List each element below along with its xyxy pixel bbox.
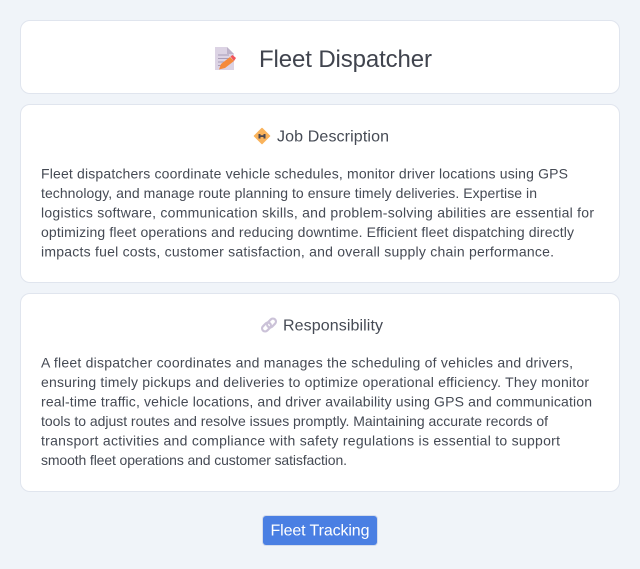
responsibility text: smooth fleet operations and customer satisfaction. xyxy=(41,452,347,468)
button: Fleet Tracking: Fleet Tracking xyxy=(270,522,370,540)
title heading: Fleet Dispatcher xyxy=(259,46,432,73)
icon: document with pencil xyxy=(215,47,236,70)
panel: job description xyxy=(20,104,620,283)
button: Fleet Tracking xyxy=(263,516,377,545)
panel: title xyxy=(20,20,620,94)
job description text: Fleet dispatchers coordinate vehicle schedules, monitor driver locations using GPS xyxy=(41,166,568,182)
responsibility text: real-time traffic, vehicle locations, and driver availability using GPS and communication xyxy=(41,394,592,410)
job description text xyxy=(41,166,594,260)
responsibility text: ensuring timely pickups and deliveries to optimize operational efficiency. They monitor xyxy=(41,374,589,390)
heading: job description: Job Description xyxy=(277,128,389,146)
icon: link xyxy=(261,318,277,332)
responsibility text: A fleet dispatcher coordinates and manages the scheduling of vehicles and drivers, xyxy=(41,354,573,370)
panel: responsibility xyxy=(20,293,620,492)
icon: road sign xyxy=(254,128,270,144)
job description text: impacts fuel costs, customer satisfaction, and overall supply chain performance. xyxy=(41,244,554,260)
job description text: technology, and manage route planning to ensure timely deliveries. Expertise in xyxy=(41,185,537,201)
job description text: optimizing fleet operations and reducing downtime. Efficient fleet dispatching directly xyxy=(41,224,574,240)
heading: responsibility: Responsibility xyxy=(283,318,383,334)
responsibility text xyxy=(41,354,592,468)
responsibility text: tools to adjust routes and resolve issues promptly. Maintaining accurate records of xyxy=(41,413,548,429)
job description text: logistics software, communication skills, and problem-solving abilities are essential for xyxy=(41,204,594,220)
responsibility text: transport activities and compliance with safety regulations is essential to support xyxy=(41,432,560,448)
